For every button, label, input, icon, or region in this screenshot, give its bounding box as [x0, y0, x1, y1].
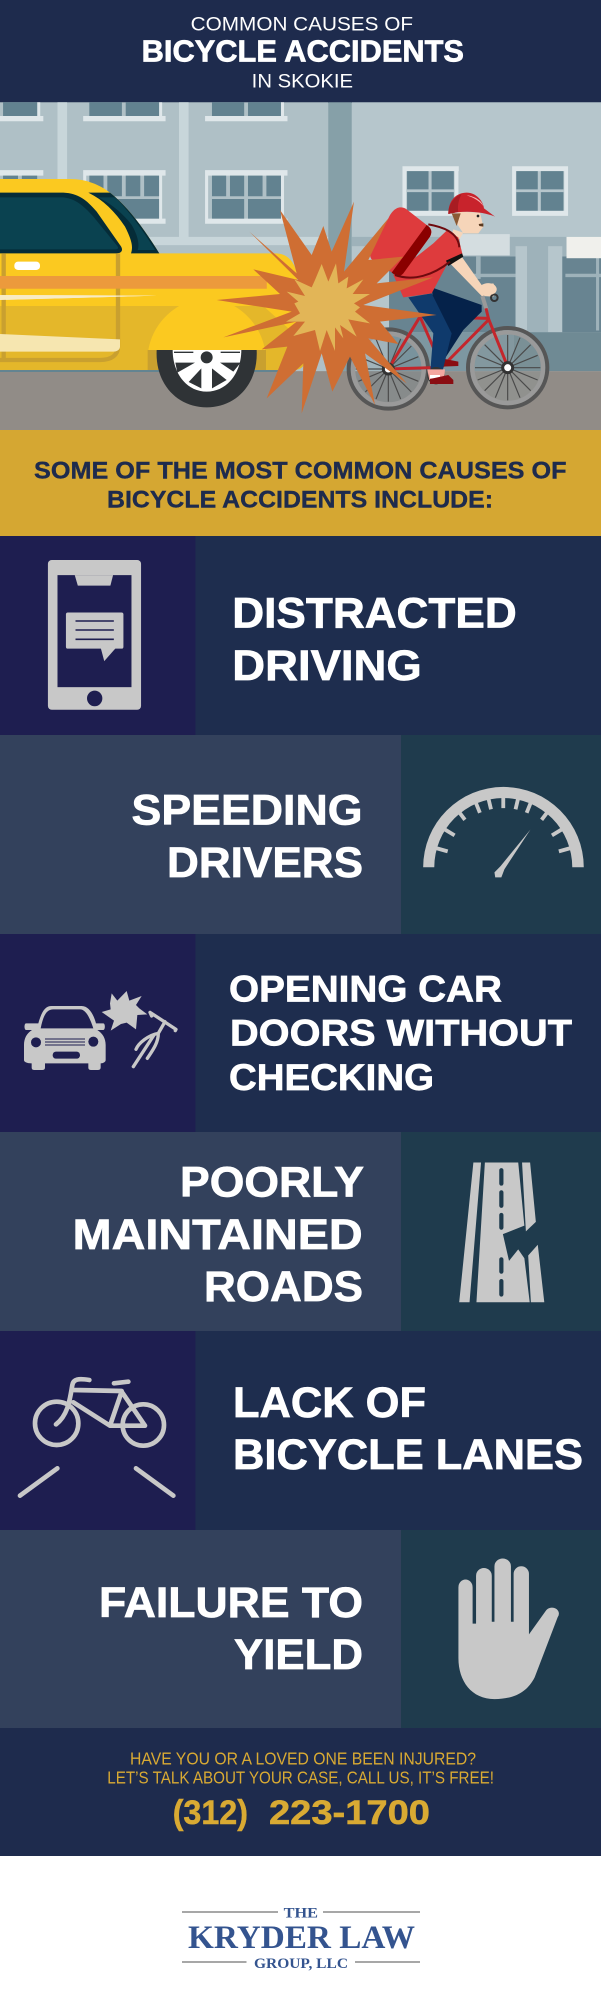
- logo word: group llc: GROUP, LLC: [254, 1956, 348, 1972]
- icon: raised hand: [458, 1558, 559, 1699]
- panel: call to action: [0, 1728, 601, 1856]
- intro line 1: SOME OF THE MOST COMMON CAUSES OF: [34, 458, 566, 485]
- panel: failure to yield: [0, 1530, 601, 1728]
- street background: [0, 102, 601, 430]
- label line 2: DRIVERS: [167, 840, 363, 887]
- phone number: 223-1700: [269, 1794, 430, 1832]
- icon: damaged road: [459, 1163, 544, 1302]
- icon: phone with message: [48, 560, 141, 710]
- label line 3: ROADS: [204, 1264, 363, 1311]
- explosion burst: [217, 202, 437, 413]
- label line 2: YIELD: [234, 1632, 363, 1679]
- car: [0, 179, 305, 407]
- label: OPENING CAR: [229, 968, 502, 1010]
- label: POORLY: [180, 1160, 364, 1207]
- illustration: car hitting cyclist: [0, 102, 601, 430]
- icon: car door hitting bicycle: [24, 991, 176, 1070]
- phone number: [173, 1794, 430, 1832]
- logo word: kryder law: KRYDER LAW: [188, 1920, 415, 1956]
- label line 2: DRIVING: [232, 643, 422, 690]
- title line 1: COMMON CAUSES OF: [191, 14, 413, 36]
- title line 2: BICYCLE ACCIDENTS: [142, 34, 464, 68]
- panel: speeding drivers: [0, 735, 601, 934]
- logo: Kryder Law Group: [182, 1906, 420, 1972]
- panel: opening car doors: [0, 934, 601, 1132]
- label line 2: BICYCLE LANES: [233, 1432, 583, 1479]
- label line 3: CHECKING: [229, 1056, 434, 1098]
- label: LACK OF: [233, 1380, 426, 1427]
- panel: lack of bicycle lanes: [0, 1331, 601, 1530]
- label line 2: DOORS WITHOUT: [230, 1012, 572, 1054]
- icon: bicycle between lane lines: [20, 1379, 173, 1496]
- title line 3: IN SKOKIE: [252, 70, 353, 92]
- call to action line 2: LET’S TALK ABOUT YOUR CASE, CALL US, IT’S FREE!: [107, 1767, 494, 1787]
- label: SPEEDING: [132, 788, 362, 834]
- panel: header: [0, 0, 601, 103]
- label: DISTRACTED: [232, 591, 517, 638]
- icon: speedometer: [423, 787, 584, 877]
- panel: intro band: [0, 430, 601, 536]
- phone number: (312): [173, 1794, 248, 1832]
- intro line 2: BICYCLE ACCIDENTS INCLUDE:: [107, 486, 493, 514]
- label line 2: MAINTAINED: [73, 1212, 363, 1259]
- call to action line 1: HAVE YOU OR A LOVED ONE BEEN INJURED?: [130, 1748, 476, 1768]
- panel: distracted driving: [0, 536, 601, 735]
- label: FAILURE TO: [99, 1580, 363, 1627]
- panel: poorly maintained roads: [0, 1132, 601, 1331]
- logo word: the: THE: [284, 1906, 318, 1922]
- bicycle and rider: [349, 193, 547, 409]
